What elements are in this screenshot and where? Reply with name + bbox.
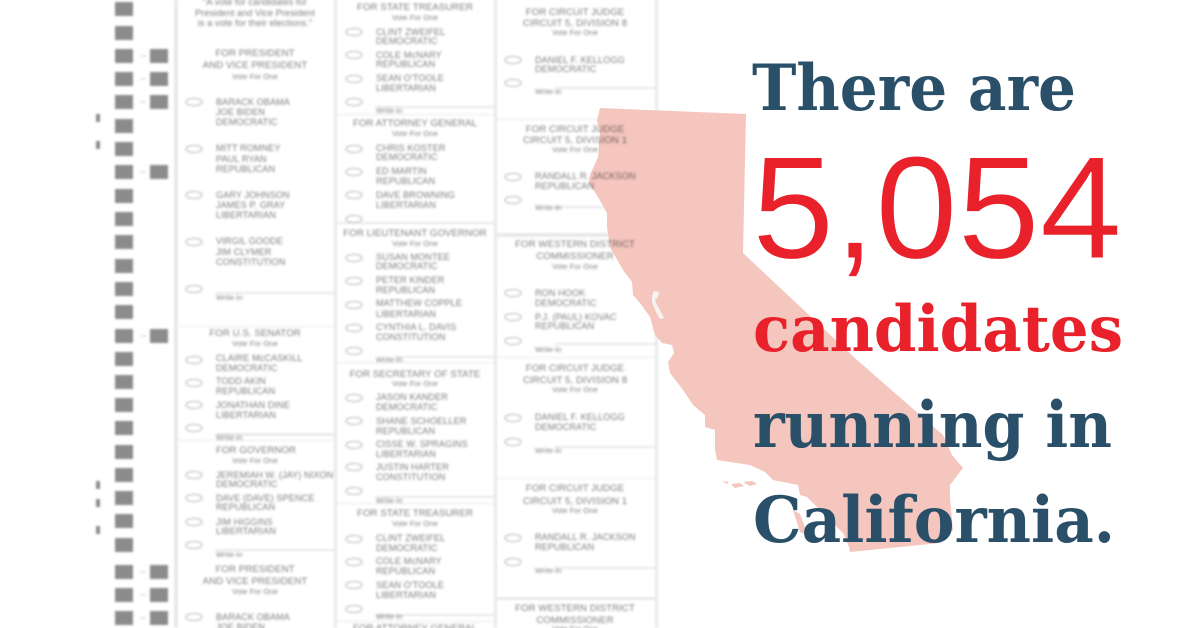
- ballot column 3: CIRCUIT 5, DIVISION 8: [523, 375, 627, 386]
- ballot column 1: FOR U.S. SENATOR: [209, 328, 301, 339]
- ballot column 3: Vote For One: [552, 28, 598, 37]
- ballot column 2: LIBERTARIAN: [376, 449, 436, 459]
- ballot column 1: REPUBLICAN: [216, 164, 275, 174]
- ballot column 3: Write-in: [535, 446, 562, 455]
- ballot column 1: FOR GOVERNOR: [216, 445, 296, 456]
- ballot column 2: REPUBLICAN: [376, 426, 435, 436]
- ballot column 2: CONSTITUTION: [376, 332, 445, 342]
- ballot column 3: Write-in: [535, 566, 562, 575]
- ballot column 2: COLE McNARY: [376, 50, 442, 60]
- ballot column 2: LIBERTARIAN: [376, 590, 436, 600]
- ballot column 3: FOR CIRCUIT JUDGE: [526, 483, 624, 494]
- headline: There are: There are: [752, 51, 1076, 126]
- ballot column 2: CONSTITUTION: [376, 472, 445, 482]
- ballot column 2: DEMOCRATIC: [376, 402, 438, 412]
- ballot column 2: Vote For One: [392, 379, 438, 388]
- ballot column 2: LIBERTARIAN: [376, 309, 436, 319]
- ballot column 1: JIM HIGGINS: [216, 517, 273, 527]
- ballot column 3: Write-in: [535, 87, 562, 96]
- ballot column 2: REPUBLICAN: [376, 59, 435, 69]
- background ballot marks and rules: [96, 0, 658, 628]
- ballot column 1: DAVE (DAVE) SPENCE: [216, 493, 314, 503]
- ballot column 2: Write-in: [376, 496, 402, 505]
- ballot column 2: CHRIS KOSTER: [376, 143, 446, 153]
- ballot column 3: FOR WESTERN DISTRICT: [515, 239, 635, 250]
- ballot column 1: MITT ROMNEY: [216, 143, 281, 153]
- ballot column 1: CONSTITUTION: [216, 257, 285, 267]
- ballot column 3: Write-in: [535, 203, 562, 212]
- ballot column 2: Vote For One: [392, 13, 438, 22]
- ballot column 2: DEMOCRATIC: [376, 543, 438, 553]
- ballot column 2: MATTHEW COPPLE: [376, 298, 462, 308]
- ballot column 2: DAVE BROWNING: [376, 190, 455, 200]
- ballot column 2: REPUBLICAN: [376, 566, 435, 576]
- headline: candidates: candidates: [753, 292, 1123, 367]
- ballot column 3: CIRCUIT 5, DIVISION 1: [523, 496, 627, 507]
- ballot column 2: ED MARTIN: [376, 166, 427, 176]
- ballot column 2: DEMOCRATIC: [376, 152, 438, 162]
- ballot column 2: CLINT ZWEIFEL: [376, 533, 445, 543]
- ballot column 2: Write-in: [376, 612, 402, 621]
- ballot column 1: AND VICE PRESIDENT: [203, 60, 307, 71]
- ballot column 1: JIM CLYMER: [216, 247, 272, 257]
- San Francisco Bay: [652, 291, 664, 319]
- ballot column 2: REPUBLICAN: [376, 176, 435, 186]
- ballot column 3: [515, 7, 636, 628]
- ballot column 2: [343, 2, 487, 628]
- ballot column 1: DEMOCRATIC: [216, 479, 278, 489]
- ballot column 3: Vote For One: [552, 506, 598, 515]
- ballot column 3: REPUBLICAN: [535, 321, 594, 331]
- ballot column 1: Write-in: [216, 433, 242, 442]
- ballot column 3: COMMISSIONER: [536, 251, 614, 262]
- ballot column 3: FOR CIRCUIT JUDGE: [526, 363, 624, 374]
- ballot column 1: Vote For One: [232, 72, 278, 81]
- headline: California.: California.: [753, 483, 1115, 558]
- ballot column 1: JEREMIAH W. (JAY) NIXON: [216, 470, 333, 480]
- ballot column 2: Vote For One: [392, 519, 438, 528]
- California map: [589, 108, 963, 552]
- ballot column 2: Write-in: [376, 106, 402, 115]
- ballot column 1: BARACK OBAMA: [216, 97, 291, 107]
- ballot column 3: Vote For One: [552, 145, 598, 154]
- ballot column 1: BARACK OBAMA: [216, 612, 291, 622]
- ballot column 1: Vote For One: [232, 587, 278, 596]
- ballot column 2: SEAN O'TOOLE: [376, 73, 444, 83]
- ballot column 3: FOR CIRCUIT JUDGE: [526, 124, 624, 135]
- ballot column 2: CYNTHIA L. DAVIS: [376, 322, 456, 332]
- ballot column 3: DANIEL F. KELLOGG: [535, 55, 625, 65]
- ballot column 3: FOR CIRCUIT JUDGE: [526, 7, 624, 18]
- ballot column 2: JASON KANDER: [376, 392, 448, 402]
- ballot column 1: [195, 0, 333, 628]
- ballot column 2: Write-in: [376, 355, 402, 364]
- ballot column 3: CIRCUIT 5, DIVISION 1: [523, 135, 627, 146]
- ballot column 2: DEMOCRATIC: [376, 36, 438, 46]
- timing marks: [96, 2, 168, 625]
- ballot column 3: FOR WESTERN DISTRICT: [515, 603, 635, 614]
- ballot column 1: CLAIRE McCASKILL: [216, 353, 303, 363]
- ballot column 1: LIBERTARIAN: [216, 410, 276, 420]
- ballot column 2: Vote For One: [392, 239, 438, 248]
- ballot column 3: RANDALL R. JACKSON: [535, 532, 636, 542]
- ballot rules: [174, 0, 658, 628]
- ballot column 3: DANIEL F. KELLOGG: [535, 412, 625, 422]
- ballot column 1: Vote For One: [232, 456, 278, 465]
- ballot column 3: RANDALL R. JACKSON: [535, 171, 636, 181]
- ballot column 1: JOE BIDEN: [216, 107, 265, 117]
- ballot column 1: JONATHAN DINE: [216, 400, 290, 410]
- ballot column 2: Vote For One: [392, 129, 438, 138]
- ballot column 1: DEMOCRATIC: [216, 117, 278, 127]
- big number: 5,054: 5,054: [752, 126, 1122, 289]
- headline: running in: running in: [753, 388, 1112, 463]
- ballot column 3: Vote For One: [552, 262, 598, 271]
- ballot column 1: GARY JOHNSON: [216, 190, 290, 200]
- ballot column 3: Write-in: [535, 345, 562, 354]
- ballot column 2: CISSE W. SPRAGINS: [376, 439, 468, 449]
- ballot column 2: FOR ATTORNEY GENERAL: [353, 118, 478, 129]
- ballot column 1: LIBERTARIAN: [216, 210, 276, 220]
- ballot column 3: P.J. (PAUL) KOVAC: [535, 312, 617, 322]
- ballot column 1: LIBERTARIAN: [216, 526, 276, 536]
- ballot column 3: RON HOOK: [535, 288, 585, 298]
- ballot column 2: LIBERTARIAN: [376, 200, 436, 210]
- ballot column 2: FOR STATE TREASURER: [357, 2, 473, 13]
- ballot column 3: COMMISSIONER: [536, 615, 614, 626]
- ballot column 1: REPUBLICAN: [216, 386, 275, 396]
- ballot column 2: SUSAN MONTEE: [376, 252, 450, 262]
- ballot column 3: DEMOCRATIC: [535, 64, 597, 74]
- ballot column 2: JUSTIN HARTER: [376, 462, 449, 472]
- ballot column 3: Vote For One: [552, 385, 598, 394]
- ballot column 2: COLE McNARY: [376, 556, 442, 566]
- ballot column 1: President and Vice President: [195, 8, 315, 18]
- ballot column 2: FOR SECRETARY OF STATE: [350, 369, 480, 380]
- ballot column 2: SHANE SCHOELLER: [376, 416, 467, 426]
- ballot column 1: Write-in: [216, 293, 242, 302]
- ballot column 1: Write-in: [216, 550, 242, 559]
- ballot ovals: [186, 28, 521, 620]
- ballot column 3: DEMOCRATIC: [535, 422, 597, 432]
- ballot column 1: TODD AKIN: [216, 376, 266, 386]
- ballot column 2: DEMOCRATIC: [376, 261, 438, 271]
- ballot column 1: is a vote for their elections.": [198, 18, 312, 28]
- ballot column 3: REPUBLICAN: [535, 542, 594, 552]
- ballot column 1: FOR PRESIDENT: [215, 48, 295, 59]
- ballot column 2: PETER KINDER: [376, 275, 445, 285]
- ballot column 3: DEMOCRATIC: [535, 298, 597, 308]
- ballot column 2: FOR STATE TREASURER: [357, 508, 473, 519]
- ballot column 2: SEAN O'TOOLE: [376, 580, 444, 590]
- ballot column 1: REPUBLICAN: [216, 502, 275, 512]
- ballot column 1: VIRGIL GOODE: [216, 236, 283, 246]
- ballot column 3: CIRCUIT 5, DIVISION 8: [523, 18, 627, 29]
- ballot column 1: DEMOCRATIC: [216, 363, 278, 373]
- ballot column 1: FOR PRESIDENT: [215, 564, 295, 575]
- ballot column 1: PAUL RYAN: [216, 154, 267, 164]
- ballot column 2: FOR LIEUTENANT GOVERNOR: [343, 228, 487, 239]
- ballot column 1: Vote For One: [232, 339, 278, 348]
- ballot column 2: CLINT ZWEIFEL: [376, 27, 445, 37]
- ballot column 2: REPUBLICAN: [376, 285, 435, 295]
- ballot column 3: REPUBLICAN: [535, 181, 594, 191]
- ballot text: [195, 0, 636, 628]
- ballot column 2: LIBERTARIAN: [376, 83, 436, 93]
- ballot column 1: JAMES P. GRAY: [216, 200, 285, 210]
- ballot column 1: AND VICE PRESIDENT: [203, 576, 307, 587]
